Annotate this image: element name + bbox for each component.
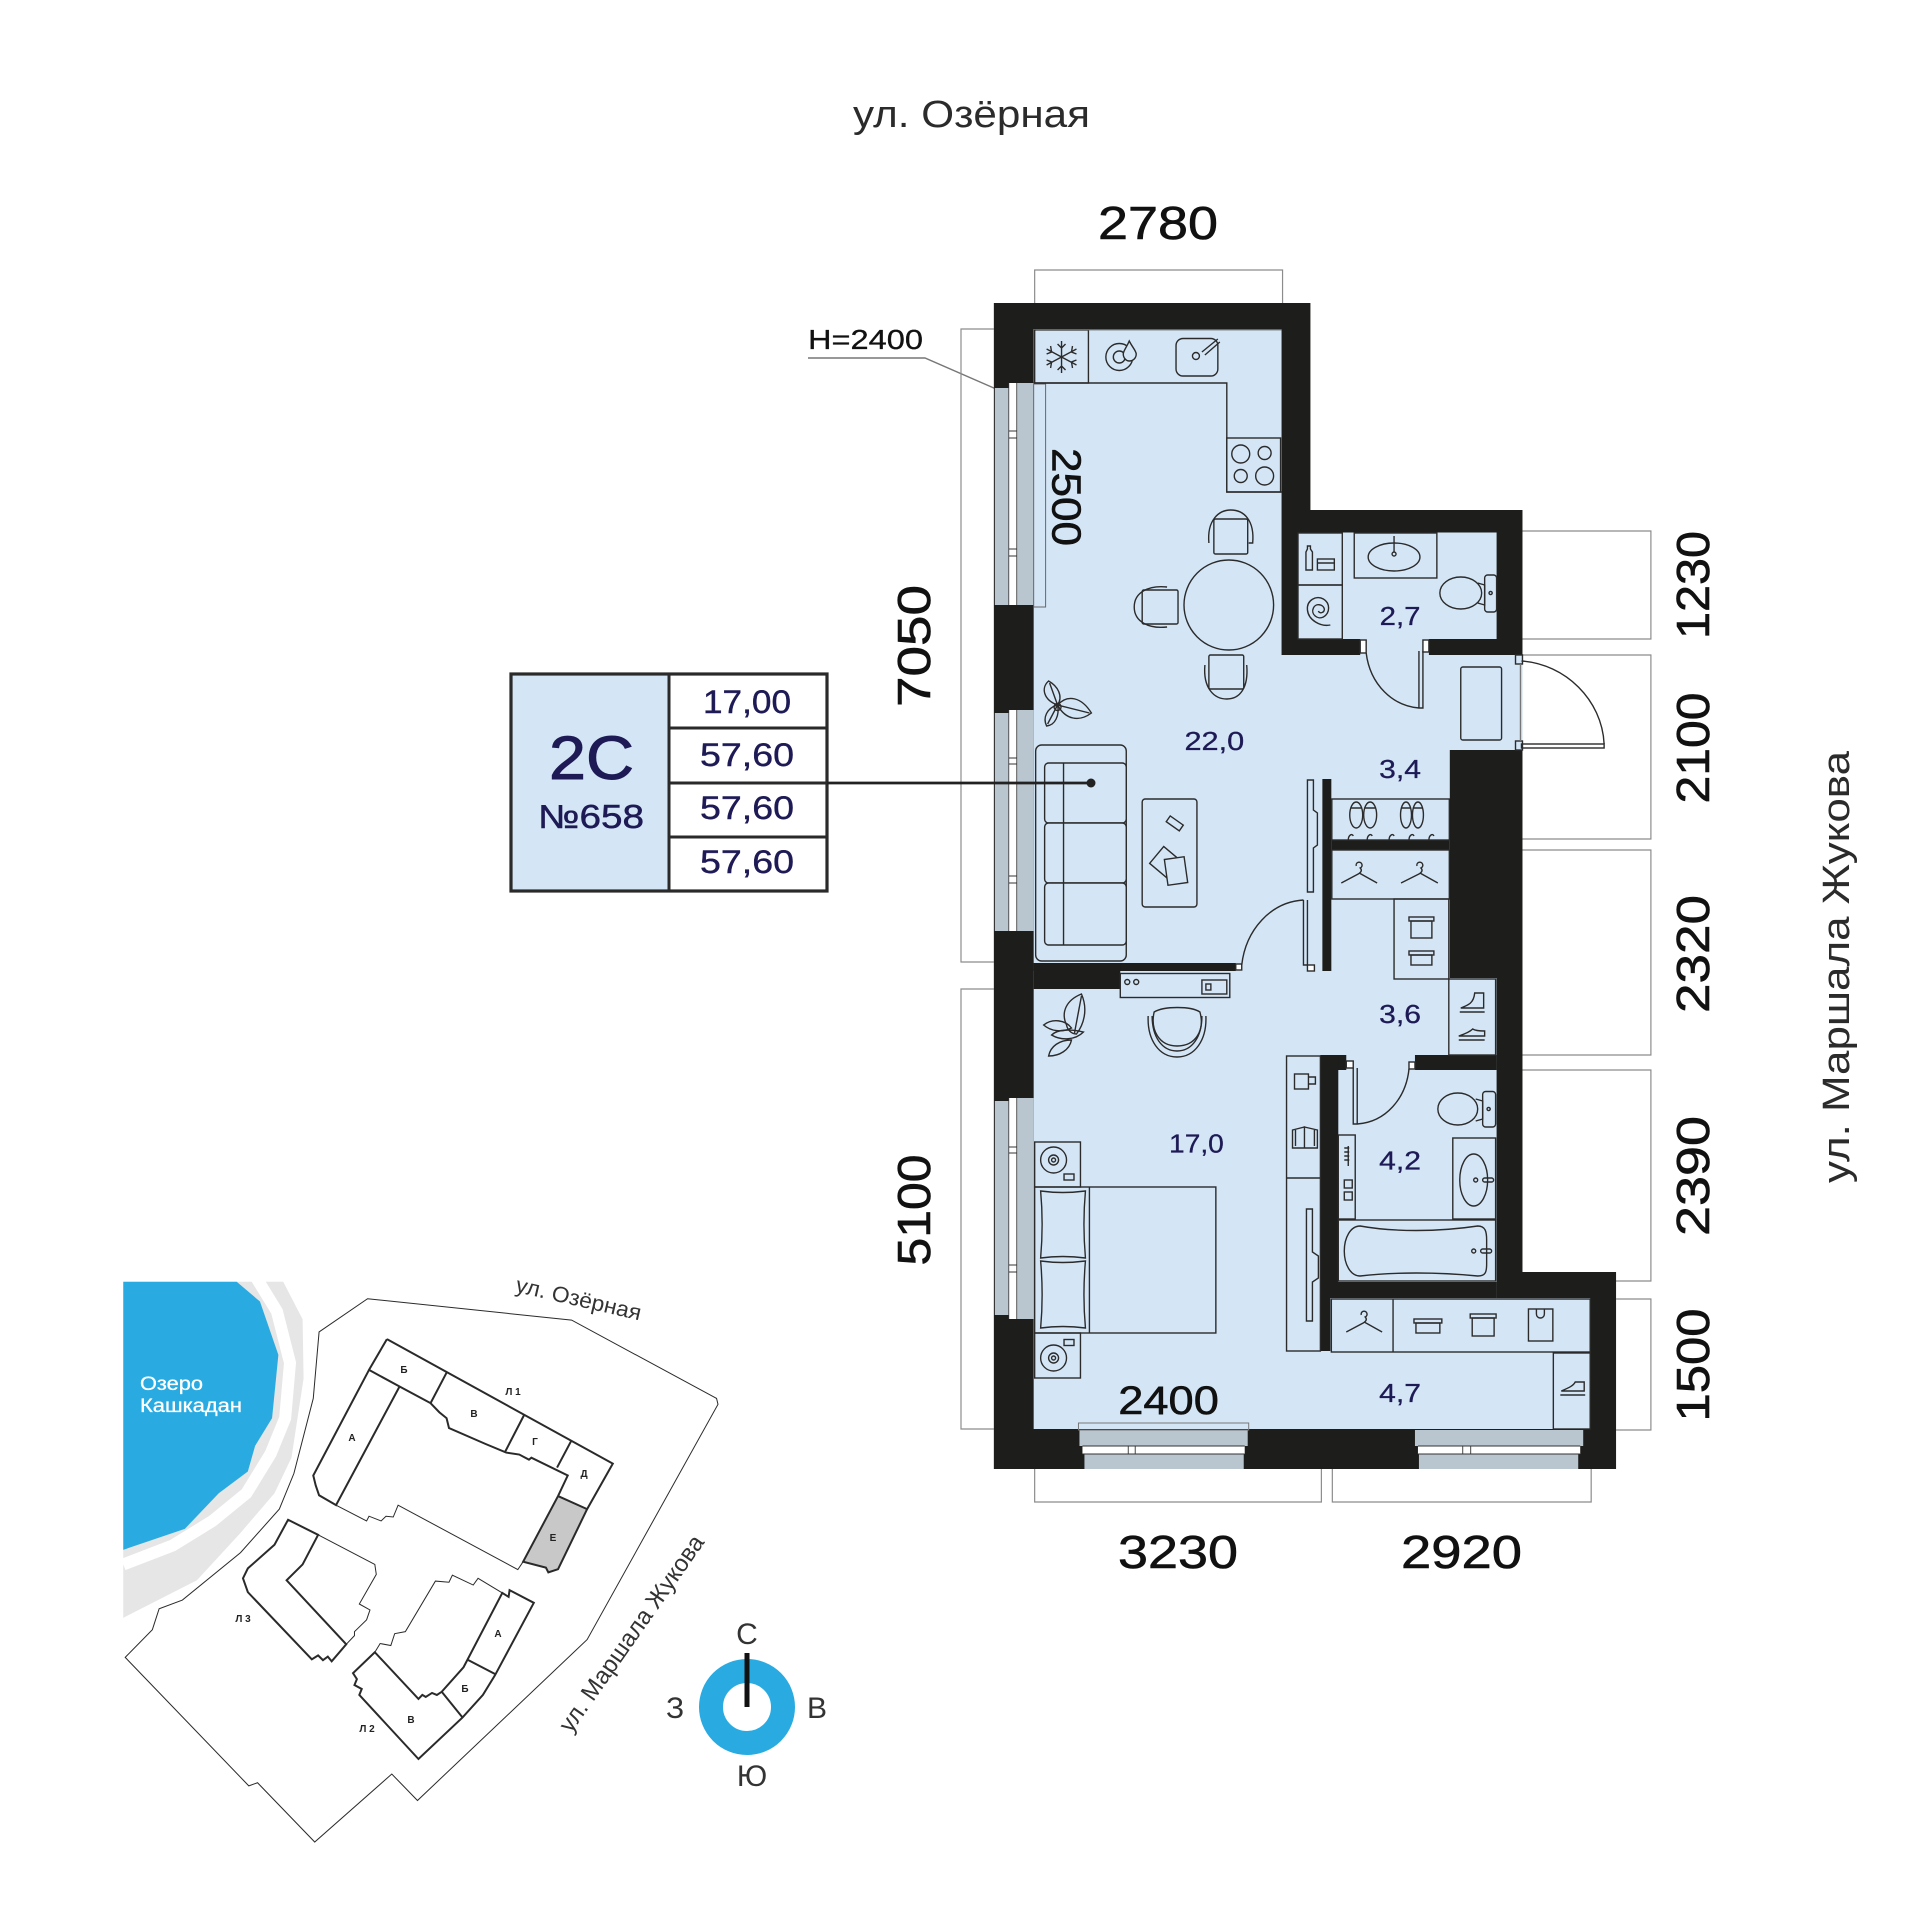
building section labels: В — [470, 1409, 478, 1420]
bathtub — [1344, 1226, 1487, 1276]
compass: Ю — [737, 1760, 767, 1793]
area: hall 3,6: 3,6 — [1379, 1001, 1421, 1029]
dimension: right 1230: 1230 — [1667, 531, 1719, 639]
building L2 — [353, 1575, 534, 1759]
bathroom 2 fixtures — [1338, 1092, 1496, 1281]
area: bathroom 2: 4,2 — [1379, 1147, 1421, 1176]
hallway mirror panel — [1307, 780, 1317, 892]
dimension extension lines — [961, 270, 1651, 1502]
building section labels: Б — [461, 1684, 469, 1695]
street label: Ozernaya: ул. Озёрная — [853, 94, 1090, 136]
building section labels: Б — [400, 1365, 408, 1376]
building section labels — [235, 1365, 588, 1735]
kitchen units — [1034, 330, 1282, 492]
area: corridor 4,7: 4,7 — [1379, 1380, 1421, 1408]
building section labels: А — [348, 1433, 356, 1444]
apartment number: №658 — [538, 798, 644, 835]
ceiling height callout: Н=2400 — [808, 324, 923, 355]
dimension: kitchen 2500: 2500 — [1044, 448, 1090, 546]
icon: kitchen sink — [1176, 338, 1220, 376]
building section labels: Д — [580, 1469, 588, 1480]
dimension: right 2100: 2100 — [1667, 692, 1719, 804]
value: living area: 17,00 — [703, 684, 791, 720]
site boundary — [125, 1299, 718, 1842]
dimension: bedroom 2400: 2400 — [1118, 1379, 1219, 1423]
ceiling height callout — [808, 324, 1003, 392]
value: area 3: 57,60 — [700, 790, 794, 826]
coffee table — [1142, 799, 1197, 907]
floor area — [1034, 329, 1590, 1429]
shoe rack — [1449, 979, 1496, 1055]
building section labels: Л 1 — [505, 1387, 521, 1398]
bottom closet — [1331, 1299, 1590, 1429]
bathroom 1 fixtures — [1298, 533, 1497, 639]
area: hall 3,4: 3,4 — [1379, 756, 1421, 784]
compass: В — [807, 1692, 827, 1725]
highlighted section E — [523, 1496, 587, 1572]
area: bedroom: 17,0 — [1169, 1130, 1224, 1159]
bedroom desk — [1120, 974, 1230, 998]
value: total area: 57,60 — [700, 737, 794, 773]
bed with bedside tables — [1035, 1142, 1216, 1378]
desk chair — [1148, 1008, 1206, 1057]
building section labels: Л 3 — [235, 1614, 251, 1625]
dimension: bottom 3230: 3230 — [1118, 1526, 1238, 1578]
hall closet: hangers — [1332, 850, 1449, 899]
compass: З — [666, 1692, 684, 1725]
apartment type: 2С — [549, 724, 634, 792]
building L3 — [243, 1520, 376, 1661]
dimension: right 1500: 1500 — [1667, 1308, 1719, 1422]
building section labels: А — [494, 1629, 502, 1640]
dimension: top width 2780: 2780 — [1098, 197, 1218, 249]
building section labels: Л 2 — [359, 1724, 375, 1735]
doors — [1236, 640, 1429, 1124]
windows: bottom wall — [1078, 1423, 1583, 1469]
building section labels: В — [407, 1715, 415, 1726]
lake label line 2: Кашкадан — [140, 1396, 242, 1417]
icon: washing machine spiral — [1307, 598, 1330, 625]
dining table with chairs — [1134, 510, 1274, 699]
dimension: left 5100: 5100 — [888, 1154, 940, 1266]
building section labels: Г — [532, 1437, 538, 1448]
windows: left wall — [995, 383, 1046, 1319]
icon: dishwasher — [1106, 341, 1136, 370]
hall closet: shoes — [1332, 799, 1449, 840]
dimension: right 2390: 2390 — [1667, 1116, 1719, 1236]
icon: stove burners — [1232, 445, 1274, 485]
plant icon: bedroom — [1044, 994, 1085, 1056]
street label: Marshala Zhukova: ул. Маршала Жукова — [1816, 750, 1858, 1183]
interior walls — [1034, 779, 1497, 1351]
exterior walls — [994, 303, 1616, 1469]
entrance door — [1516, 655, 1604, 750]
plant icon: living room — [1044, 681, 1091, 726]
compass — [666, 1618, 827, 1793]
lake label: Озеро — [140, 1374, 203, 1395]
sofa — [1036, 745, 1126, 961]
building section labels: Е — [550, 1533, 557, 1544]
leader line from table to plan — [827, 778, 1096, 788]
dimension: bottom 2920: 2920 — [1401, 1526, 1522, 1578]
entry console — [1461, 667, 1502, 740]
embankment — [123, 1282, 304, 1618]
apartment info table — [511, 674, 827, 891]
compass: С — [736, 1618, 758, 1651]
minimap street: Zhukova: ул. Маршала Жукова — [554, 1530, 710, 1737]
icon: fridge snowflake — [1047, 341, 1076, 373]
site minimap — [123, 1272, 718, 1842]
building L1 — [313, 1339, 613, 1572]
minimap street: Ozernaya: ул. Озёрная — [514, 1272, 644, 1325]
lake — [123, 1282, 278, 1550]
value: area 4: 57,60 — [700, 844, 794, 880]
dimension: right 2320: 2320 — [1667, 895, 1719, 1013]
floor plan — [961, 270, 1651, 1502]
dimension: left 7050: 7050 — [888, 585, 940, 707]
area: bathroom 1: 2,7 — [1380, 603, 1420, 631]
hall closet: boxes — [1394, 899, 1449, 979]
bedroom shelf and tv — [1287, 1056, 1320, 1351]
room areas: 22,0 — [1184, 728, 1244, 756]
